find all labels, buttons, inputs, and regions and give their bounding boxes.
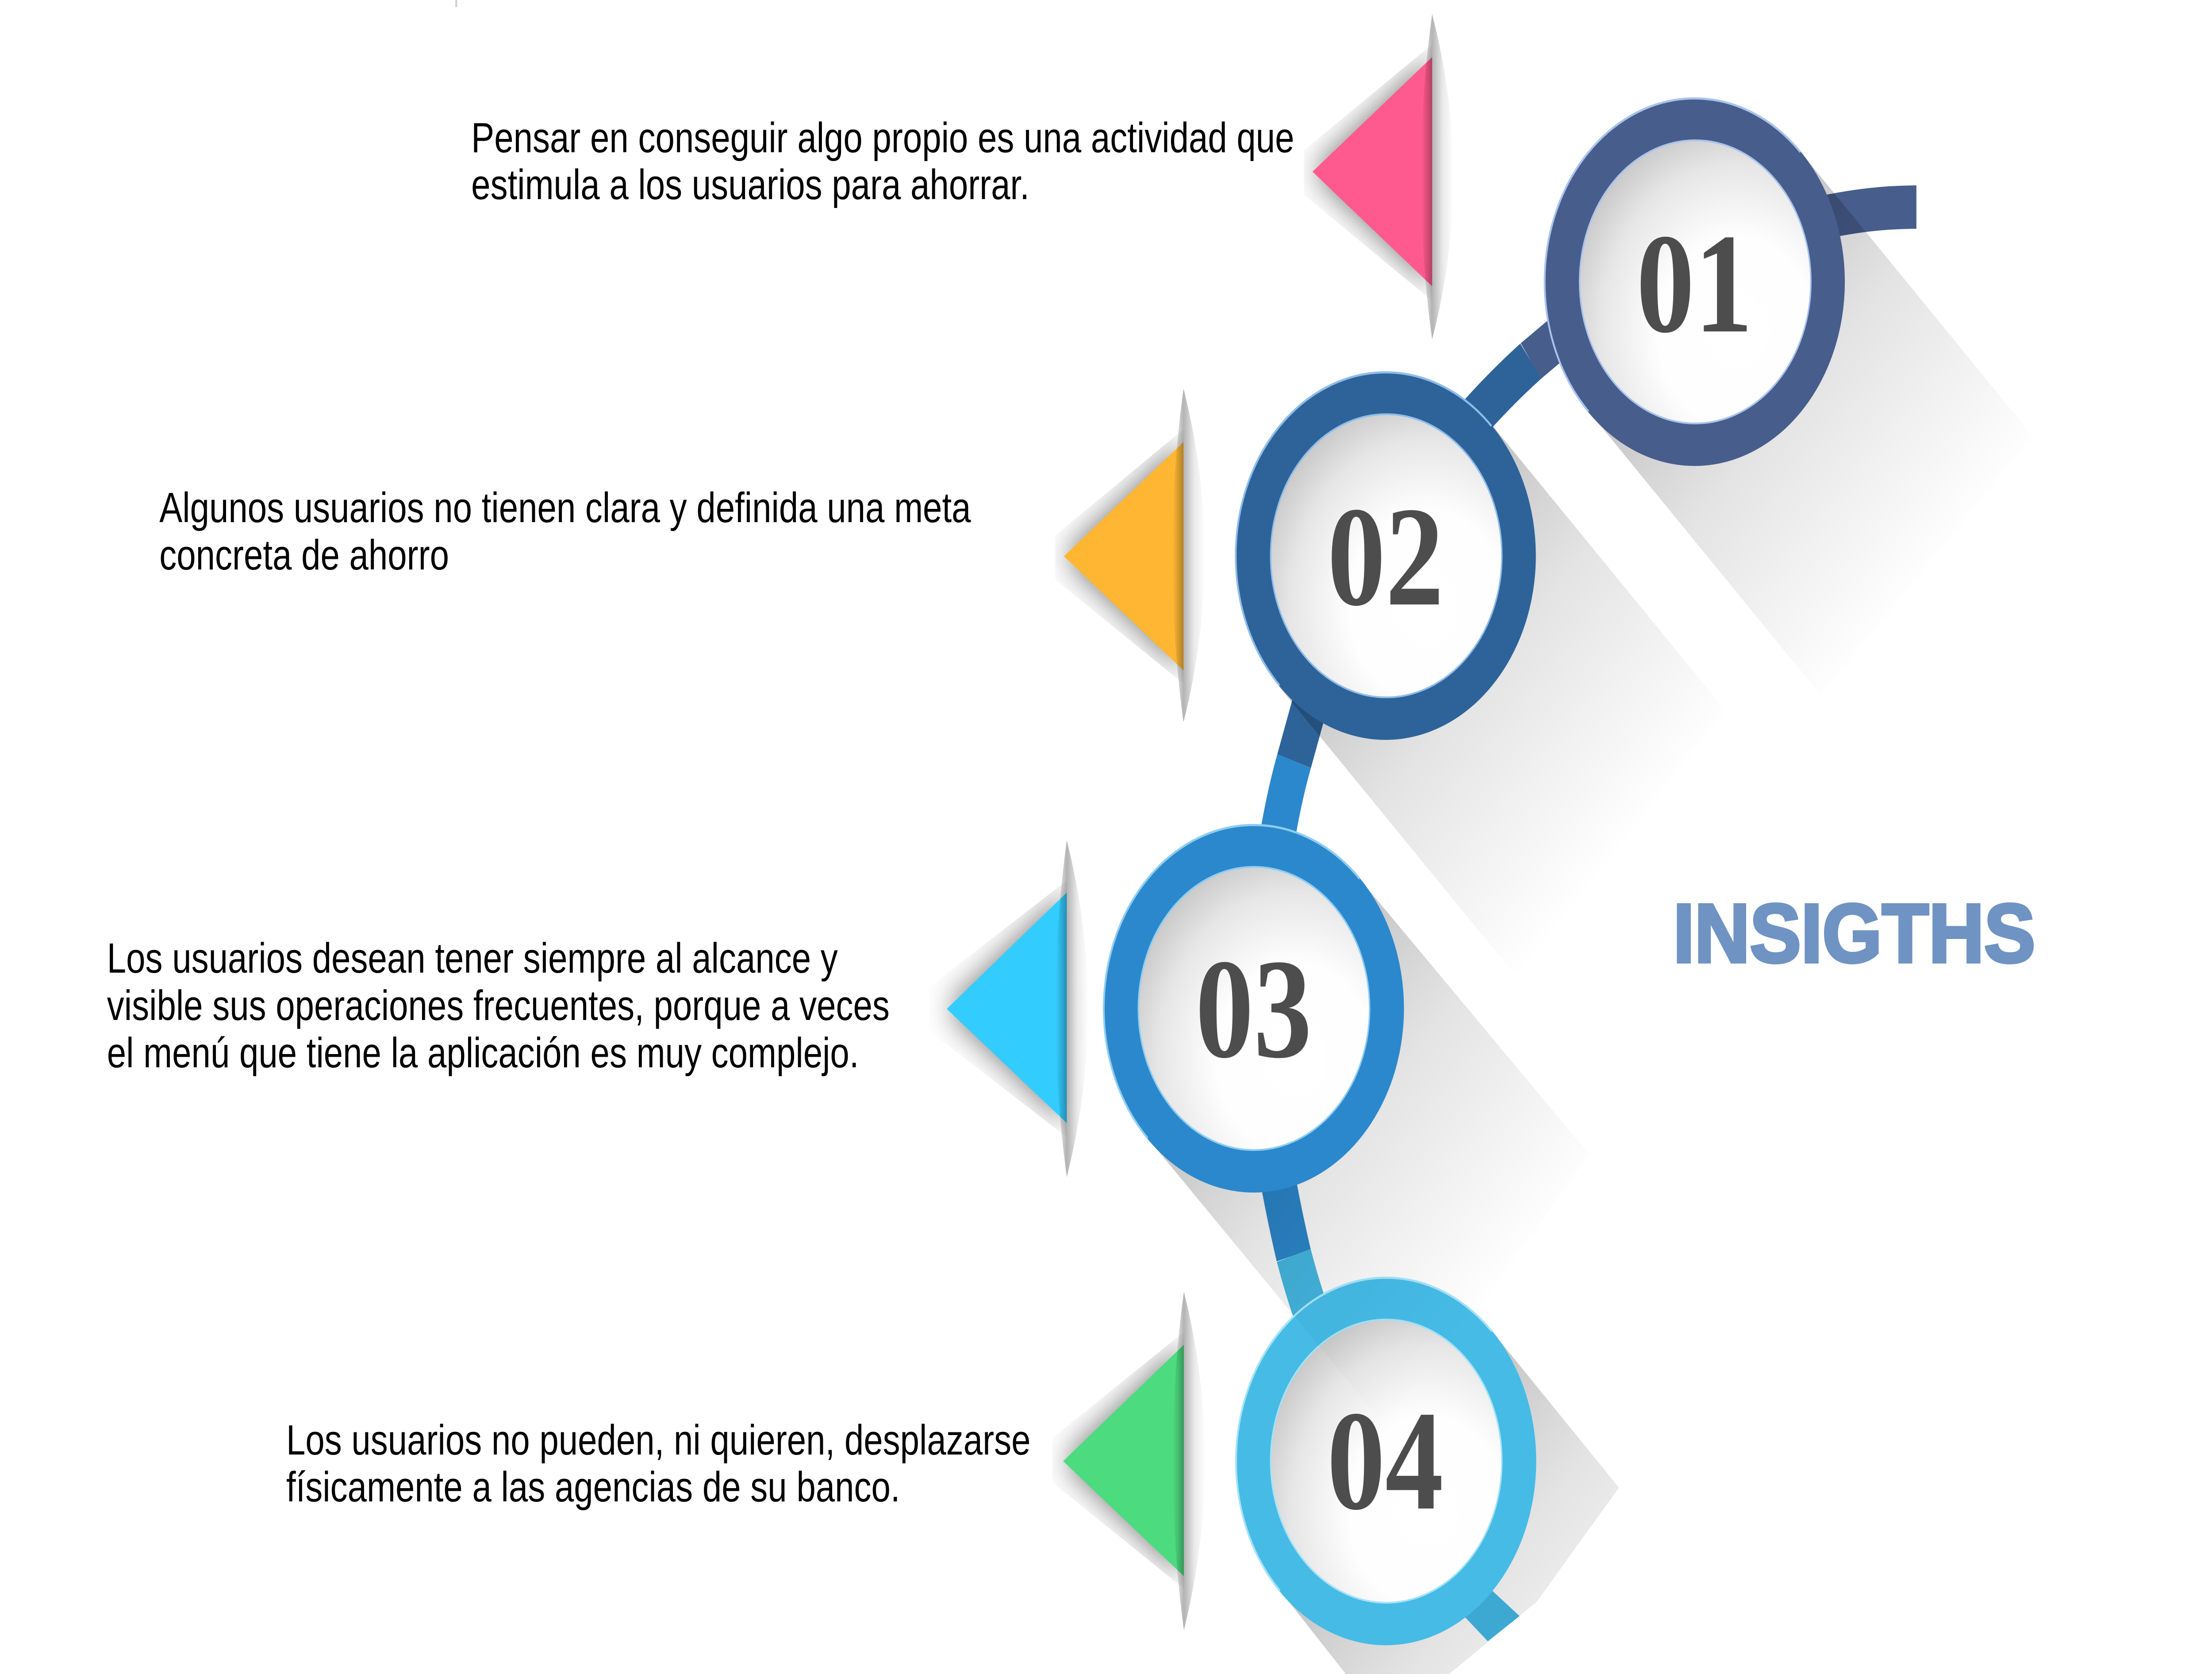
decorative tick mark at top	[455, 0, 457, 7]
text block: insight 1	[471, 115, 1294, 208]
step 02 circle	[1235, 372, 1536, 740]
step 01 circle	[1544, 98, 1845, 466]
long shadow: circle 03	[1148, 879, 1590, 1434]
text block: insight 4	[286, 1417, 1031, 1511]
icon: green triangle	[1063, 1292, 1206, 1630]
icon: blue triangle	[947, 840, 1088, 1177]
icon: pink triangle	[1313, 14, 1454, 339]
text block: insight 3: Los usuarios desean tener siempre al alcance y	[107, 935, 838, 982]
long shadow: circle 02	[1279, 425, 1726, 975]
number 04: 04	[1327, 1382, 1444, 1539]
long shadow: circle 01	[1589, 152, 2033, 696]
long shadow: circle 04	[1280, 1332, 1619, 1674]
text block: insight 1: Pensar en conseguir algo propio es una actividad que	[471, 115, 1294, 162]
number 02: 02	[1327, 477, 1444, 635]
text block: insight 3: visible sus operaciones frecuentes, porque a veces	[107, 982, 890, 1029]
text block: insight 1: estimula a los usuarios para ahorrar.	[471, 162, 1029, 208]
icon: orange triangle	[1064, 389, 1205, 722]
text block: insight 3: el menú que tiene la aplicación es muy complejo.	[107, 1030, 859, 1077]
text block: insight 2: Algunos usuarios no tienen clara y definida una meta	[159, 485, 971, 531]
number 01: 01	[1636, 204, 1753, 362]
connector: curved line through the circles	[1278, 207, 1916, 1310]
text block: insight 4: físicamente a las agencias de su banco.	[286, 1464, 900, 1511]
connector: tail below circle 04	[1464, 1590, 1520, 1641]
text block: insight 4: Los usuarios no pueden, ni quieren, desplazarse	[286, 1417, 1031, 1464]
heading: INSIGTHS: INSIGTHS	[1673, 887, 2035, 980]
text block: insight 3	[107, 935, 890, 1077]
text block: insight 2	[159, 485, 971, 579]
text block: insight 2: concreta de ahorro	[159, 532, 449, 579]
step 03 circle	[1103, 824, 1404, 1193]
step 04 circle	[1235, 1276, 1536, 1645]
number 03: 03	[1195, 930, 1312, 1088]
